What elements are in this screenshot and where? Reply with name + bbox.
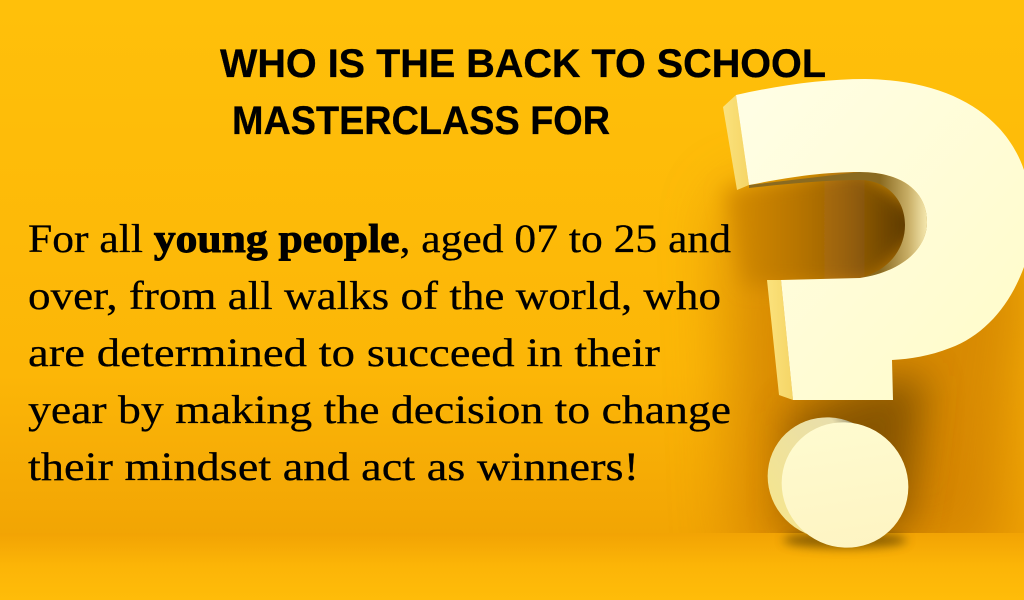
body text: over, from all walks of the world, who	[28, 273, 721, 318]
background floor	[0, 533, 1024, 600]
body text	[28, 216, 731, 489]
body text: year by making the decision to change	[28, 387, 731, 432]
hook side facet	[723, 95, 749, 190]
dot side	[744, 393, 914, 563]
body text: their mindset and act as winners!	[28, 444, 639, 489]
dot face	[757, 398, 933, 572]
question mark face	[736, 79, 1024, 400]
title	[220, 42, 826, 143]
icon: question mark	[723, 79, 1024, 400]
inner curve facet	[749, 172, 927, 278]
title: WHO IS THE BACK TO SCHOOL	[220, 42, 826, 86]
stem side facet	[767, 280, 793, 400]
body text: are determined to succeed in their	[28, 330, 660, 375]
body text: For all young people , aged 07 to 25 and	[28, 216, 731, 261]
icon: question mark dot	[744, 393, 933, 572]
title: MASTERCLASS FOR	[232, 99, 610, 143]
floor shadow	[783, 532, 907, 548]
cast shadow on wall	[725, 170, 1024, 560]
shadow inside hook	[725, 165, 935, 285]
